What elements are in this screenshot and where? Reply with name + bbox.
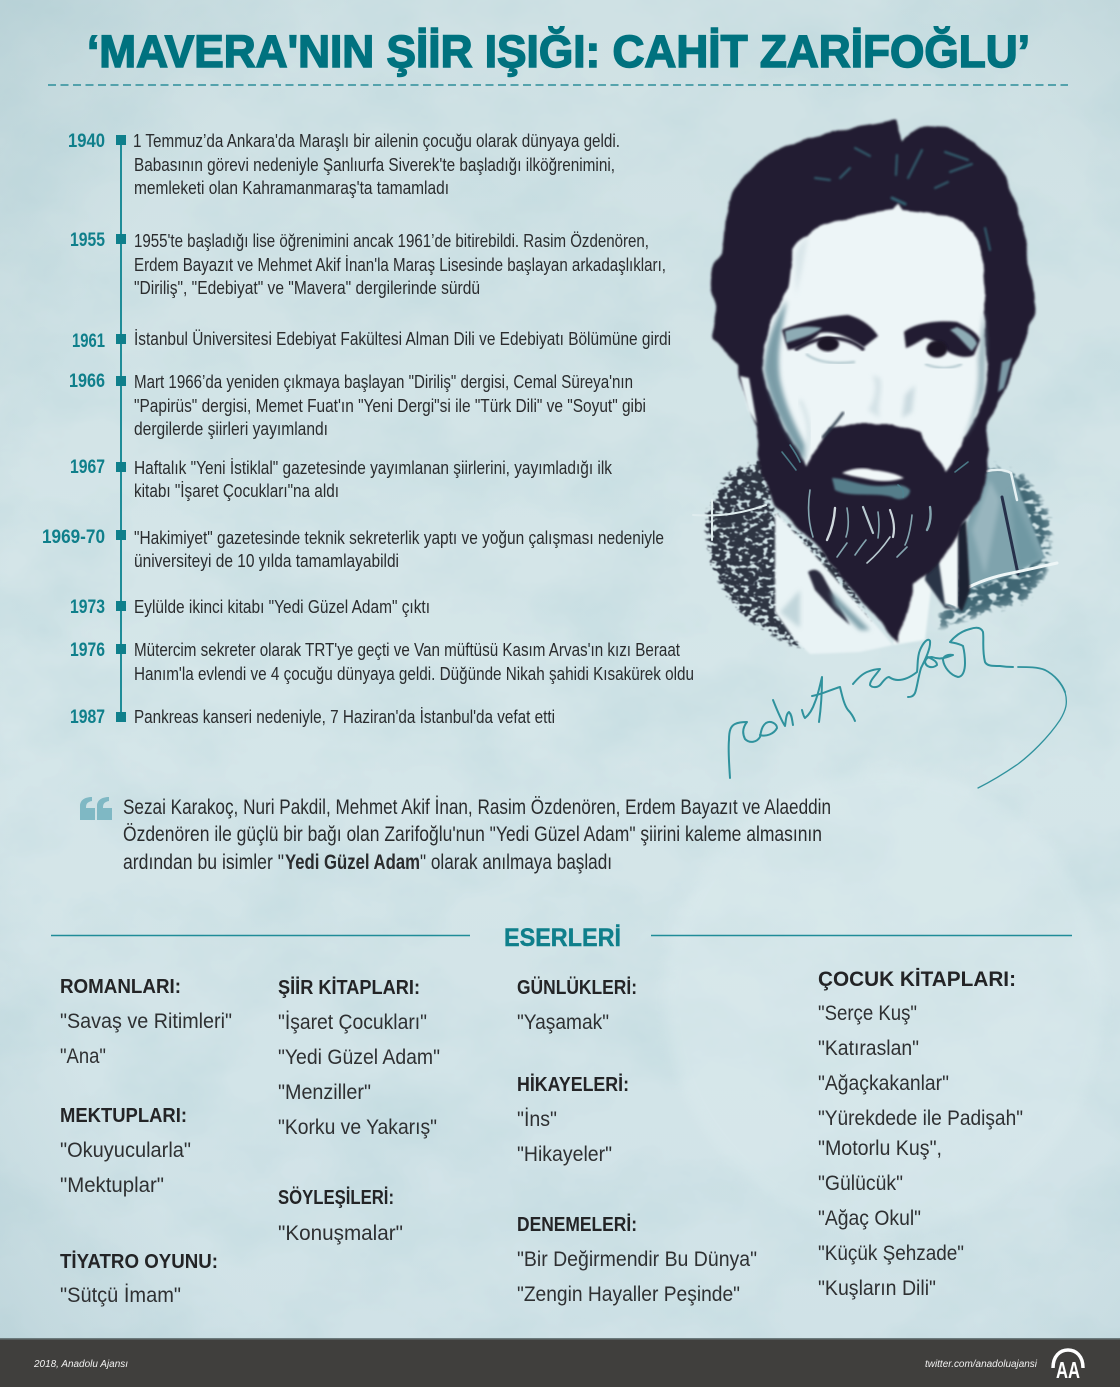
timeline entry 1976: Hanım'la evlendi ve 4 çocuğu dünyaya geldi. Düğünde Nikah şahidi Kısakürek oldu bbox=[134, 664, 694, 684]
jacket seams bbox=[693, 470, 1057, 590]
section heading: eserleri: ESERLERİ bbox=[504, 924, 621, 952]
ear bbox=[740, 376, 757, 424]
romanları: ROMANLARI: bbox=[60, 976, 181, 998]
footer bar bbox=[0, 1338, 1120, 1387]
denemeleri: DENEMELERİ: bbox=[517, 1213, 637, 1236]
quote block bbox=[80, 795, 831, 874]
timeline entry 1969-70: üniversiteyi de 10 yılda tamamlayabildi bbox=[134, 551, 399, 571]
jacket left, speckled bbox=[700, 450, 890, 650]
timeline entry 1969-70: 1969-70 bbox=[42, 527, 105, 548]
çocuk kitapları bbox=[818, 968, 1023, 1300]
timeline entry 1940: memleketi olan Kahramanmaraş'ta tamamladı bbox=[134, 178, 449, 198]
timeline entry 1940: 1 Temmuz’da Ankara'da Maraşlı bir ailenin çocuğu olarak dünyaya geldi. bbox=[133, 131, 620, 151]
timeline entry 1976 bbox=[70, 640, 694, 684]
şiir kitapları: ŞİİR KİTAPLARI: bbox=[278, 976, 420, 999]
timeline bbox=[42, 131, 694, 728]
söyleşileri bbox=[278, 1186, 403, 1245]
günlükleri bbox=[517, 976, 637, 1034]
timeline entry 1966: "Papirüs" dergisi, Memet Fuat'ın "Yeni Dergi"si ile "Türk Dili" ve "Soyut" gibi bbox=[134, 396, 646, 416]
timeline entry 1961: İstanbul Üniversitesi Edebiyat Fakültesi Alman Dili ve Edebiyatı Bölümüne girdi bbox=[134, 329, 671, 349]
timeline entry 1940: 1940 bbox=[68, 131, 105, 152]
söyleşileri: SÖYLEŞİLERİ: bbox=[278, 1186, 394, 1209]
hikayeleri: "Hikayeler" bbox=[517, 1143, 612, 1166]
çocuk kitapları: "Kuşların Dili" bbox=[818, 1277, 936, 1300]
works column 1 bbox=[60, 976, 232, 1307]
denemeleri: "Zengin Hayaller Peşinde" bbox=[517, 1283, 740, 1306]
şiir kitapları: "Menziller" bbox=[278, 1081, 371, 1104]
timeline entry 1973 bbox=[70, 597, 430, 618]
timeline entry 1955: "Diriliş", "Edebiyat" ve "Mavera" dergilerinde sürdü bbox=[134, 278, 480, 298]
çocuk kitapları: "Motorlu Kuş", bbox=[818, 1137, 942, 1160]
face bbox=[763, 204, 987, 472]
signature bbox=[729, 628, 1066, 788]
çocuk kitapları: "Yürekdede ile Padişah" bbox=[818, 1107, 1023, 1130]
çocuk kitapları: "Ağaç Okul" bbox=[818, 1207, 921, 1230]
şiir kitapları: "Korku ve Yakarış" bbox=[278, 1116, 437, 1139]
romanları: "Ana" bbox=[60, 1045, 106, 1068]
jacket right, speckled lower edge bbox=[925, 455, 1056, 640]
works column 2 bbox=[278, 976, 440, 1245]
timeline entry 1955 bbox=[70, 230, 666, 298]
timeline entry 1961 bbox=[72, 329, 671, 352]
timeline entry 1973: 1973 bbox=[70, 597, 105, 618]
timeline entry 1969-70 bbox=[42, 527, 664, 571]
portrait illustration bbox=[693, 120, 1057, 654]
hikayeleri: HİKAYELERİ: bbox=[517, 1073, 629, 1096]
mektupları: "Okuyucularla" bbox=[60, 1139, 191, 1162]
shirt and collars bbox=[775, 511, 893, 654]
timeline entry 1966: dergilerde şiirleri yayımlandı bbox=[134, 419, 328, 439]
right eye area bbox=[904, 321, 980, 357]
lip bbox=[832, 478, 910, 499]
çocuk kitapları: ÇOCUK KİTAPLARI: bbox=[818, 968, 1016, 991]
face shading bbox=[764, 300, 805, 462]
icon: AA logo bbox=[1053, 1350, 1083, 1383]
hair highlights bbox=[815, 148, 990, 250]
hikayeleri: "İns" bbox=[517, 1108, 557, 1131]
tiyatro oyunu: "Sütçü İmam" bbox=[60, 1284, 181, 1307]
quote text: ardından bu isimler " bbox=[123, 850, 284, 874]
çocuk kitapları: "Katıraslan" bbox=[818, 1037, 919, 1060]
tiyatro oyunu: TİYATRO OYUNU: bbox=[60, 1250, 218, 1273]
timeline entry 1967: kitabı "İşaret Çocukları"na aldı bbox=[134, 481, 339, 501]
timeline entry 1955: 1955'te başladığı lise öğrenimini ancak 1961’de bitirebildi. Rasim Özdenören, bbox=[134, 231, 649, 251]
works column 3 bbox=[517, 976, 757, 1306]
timeline entry 1966: Mart 1966’da yeniden çıkmaya başlayan "Diriliş" dergisi, Cemal Süreya'nın bbox=[134, 372, 633, 392]
quote text bbox=[123, 795, 831, 874]
timeline entry 1940: Babasının görevi nedeniyle Şanlıurfa Siverek'te başladığı ilköğrenimini, bbox=[134, 155, 615, 175]
works column 4 bbox=[818, 968, 1023, 1300]
şiir kitapları bbox=[278, 976, 440, 1139]
footer twitter: twitter.com/anadoluajansi bbox=[925, 1359, 1038, 1370]
tiyatro oyunu bbox=[60, 1250, 218, 1307]
denemeleri bbox=[517, 1213, 757, 1306]
timeline entry 1967: 1967 bbox=[70, 457, 105, 478]
çocuk kitapları: "Ağaçkakanlar" bbox=[818, 1072, 949, 1095]
timeline entry 1961: 1961 bbox=[72, 331, 105, 352]
romanları: "Savaş ve Ritimleri" bbox=[60, 1010, 232, 1033]
günlükleri: "Yaşamak" bbox=[517, 1011, 609, 1034]
şiir kitapları: "Yedi Güzel Adam" bbox=[278, 1046, 440, 1069]
şiir kitapları: "İşaret Çocukları" bbox=[278, 1011, 427, 1034]
icon: quotation marks bbox=[80, 797, 112, 820]
timeline entry 1955: 1955 bbox=[70, 230, 105, 251]
left eye area bbox=[782, 315, 878, 350]
timeline entry 1969-70: "Hakimiyet" gazetesinde teknik sekreterlik yaptı ve yoğun çalışması nedeniyle bbox=[134, 528, 664, 548]
quote text: Sezai Karakoç, Nuri Pakdil, Mehmet Akif İnan, Rasim Özdenören, Erdem Bayazıt ve Alaeddin bbox=[123, 795, 831, 819]
timeline entry 1966: 1966 bbox=[69, 371, 105, 392]
quote text: Özdenören ile güçlü bir bağı olan Zarifoğlu'nun "Yedi Güzel Adam" şiirini kaleme almasının bbox=[123, 822, 822, 846]
nose crease bbox=[823, 413, 843, 437]
timeline entry 1955: Erdem Bayazıt ve Mehmet Akif İnan'la Maraş Lisesinde başlayan arkadaşlıkları, bbox=[134, 255, 666, 275]
mektupları: "Mektuplar" bbox=[60, 1174, 164, 1197]
hair and beard mass bbox=[711, 120, 1034, 643]
timeline entry 1987: Pankreas kanseri nedeniyle, 7 Haziran'da İstanbul'da vefat etti bbox=[134, 707, 555, 727]
timeline entry 1967 bbox=[70, 457, 613, 501]
timeline entry 1967: Haftalık "Yeni İstiklal" gazetesinde yayımlanan şiirlerini, yayımladığı ilk bbox=[134, 458, 613, 478]
denemeleri: "Bir Değirmendir Bu Dünya" bbox=[517, 1248, 757, 1271]
timeline entry 1976: 1976 bbox=[70, 640, 105, 661]
mektupları: MEKTUPLARI: bbox=[60, 1105, 187, 1127]
icon: AA logo: AA bbox=[1056, 1357, 1080, 1383]
timeline entry 1940 bbox=[68, 131, 620, 198]
çocuk kitapları: "Gülücük" bbox=[818, 1172, 903, 1195]
timeline entry 1987: 1987 bbox=[70, 707, 105, 728]
timeline entry 1966 bbox=[69, 371, 646, 439]
söyleşileri: "Konuşmalar" bbox=[278, 1222, 403, 1245]
beard strands bbox=[782, 445, 968, 563]
quote text: Yedi Güzel Adam bbox=[285, 850, 420, 874]
quote text: " olarak anılmaya başladı bbox=[420, 850, 612, 874]
title: ‘MAVERA'NIN ŞİİR IŞIĞI: CAHİT ZARİFOĞLU’ bbox=[87, 26, 1030, 77]
çocuk kitapları: "Küçük Şehzade" bbox=[818, 1242, 964, 1265]
çocuk kitapları: "Serçe Kuş" bbox=[818, 1002, 917, 1025]
timeline entry 1976: Mütercim sekreter olarak TRT'ye geçti ve Van müftüsü Kasım Arvas'ın kızı Beraat bbox=[134, 640, 680, 660]
mektupları bbox=[60, 1105, 191, 1197]
footer credit: 2018, Anadolu Ajansı bbox=[33, 1359, 128, 1370]
hikayeleri bbox=[517, 1073, 629, 1166]
romanları bbox=[60, 976, 232, 1068]
timeline entry 1973: Eylülde ikinci kitabı "Yedi Güzel Adam" çıktı bbox=[134, 597, 430, 617]
günlükleri: GÜNLÜKLERİ: bbox=[517, 976, 637, 999]
